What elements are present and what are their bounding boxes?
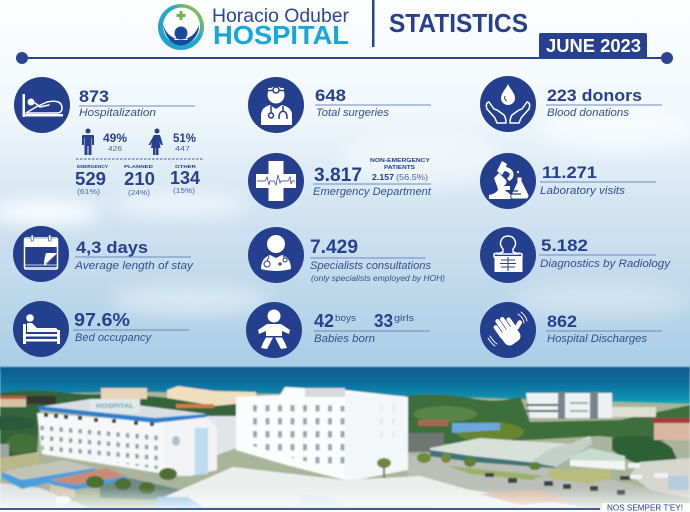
gender split (82, 128, 196, 155)
panel: babies born: boys (335, 313, 357, 323)
panel: babies born (246, 302, 430, 358)
value: 11.271 (542, 163, 597, 182)
non-emergency patients note: PATIENTS (384, 165, 415, 171)
panel: specialists consultations (248, 227, 445, 283)
panel: blood donations (480, 76, 662, 132)
icon: specialist (248, 227, 304, 283)
values: 42 (314, 311, 334, 331)
admission types (75, 164, 200, 197)
panel: radiology (480, 227, 672, 283)
icon: hospital bed (14, 77, 70, 133)
building between wings (207, 416, 236, 455)
title: STATISTICS (389, 8, 528, 38)
admission types: 134 (170, 168, 200, 188)
panel: bed occupancy (13, 301, 189, 357)
panel: average length of stay (13, 226, 195, 282)
tall white building (236, 387, 408, 480)
icon: microscope and flask (480, 153, 536, 209)
value: 223 donors (547, 86, 642, 105)
icon: baby (246, 302, 302, 358)
palms by tower (377, 453, 451, 479)
admission types: OTHER (175, 164, 197, 170)
value: 7.429 (310, 237, 358, 258)
icon: cross with heartbeat (248, 153, 304, 209)
label: Bed occupancy (75, 332, 153, 344)
value: 4,3 days (76, 238, 148, 257)
icon: patient in bed (13, 301, 69, 357)
gender split: 51% (173, 131, 196, 145)
panel: babies born: girls (394, 313, 415, 323)
icon: hands with blood drop (480, 76, 536, 132)
header divider (372, 0, 374, 47)
admission types: (15%) (173, 186, 196, 195)
label: Specialists consultations (310, 260, 432, 272)
trees right (405, 394, 690, 446)
left hospital building (39, 399, 207, 420)
logo wordmark: Horacio Oduber (212, 6, 350, 27)
non-emergency patients note: (56.5%) (396, 173, 428, 182)
value: 3.817 (314, 165, 362, 186)
logo: HOSPITAL (213, 20, 349, 50)
icon: doctor (248, 77, 304, 133)
low annexes left (2, 460, 95, 485)
label: Total surgeries (316, 107, 390, 119)
foreground white roof (157, 467, 585, 507)
non-emergency patients note: 2.157 (372, 173, 395, 182)
icon: man (82, 128, 94, 155)
icon: woman (148, 128, 163, 155)
panel: hospital discharges (480, 302, 662, 358)
label: Emergency Department (313, 186, 432, 198)
gender split: 49% (103, 131, 127, 145)
footnote: (only specialists employed by HOH) (311, 274, 445, 283)
value: 5.182 (541, 236, 588, 255)
date tab (539, 33, 647, 58)
date tab: JUNE 2023 (546, 36, 641, 56)
apartment block (526, 393, 612, 418)
panel: babies born: 33 (374, 311, 393, 331)
icon: calendar (13, 226, 69, 282)
label: Laboratory visits (540, 185, 626, 197)
palms left (86, 468, 177, 494)
trees behind left (0, 390, 240, 462)
hospital aerial photo: HOSPITAL (96, 403, 134, 410)
logo (158, 4, 350, 50)
value: 97.6% (74, 310, 130, 330)
hospital aerial photo (0, 367, 690, 512)
label: Blood donations (547, 107, 630, 119)
label: Diagnostics by Radiology (540, 258, 672, 270)
logo emblem (158, 4, 204, 50)
panel: emergency department (248, 153, 432, 209)
admission types: PLANNED (124, 164, 154, 170)
value: 862 (547, 312, 577, 331)
clouds (0, 108, 690, 318)
label: Hospital Discharges (547, 333, 648, 345)
background sky (0, 0, 690, 372)
admission types: (61%) (77, 187, 101, 196)
admission types: (24%) (128, 188, 151, 197)
bottom fade (0, 488, 690, 510)
admission types: EMERGENCY (77, 164, 109, 170)
panel: laboratory visits (480, 153, 656, 209)
label: Hospitalization (79, 107, 156, 119)
far left buildings (0, 397, 26, 407)
beach-side building and red house (612, 407, 656, 417)
value: 873 (79, 87, 109, 106)
non-emergency patients note (370, 158, 430, 182)
non-emergency patients note: NON-EMERGENCY (370, 158, 430, 164)
land base (0, 392, 690, 512)
footer rule and motto (0, 503, 690, 512)
label: Babies born (314, 333, 375, 345)
foreground ground left (0, 483, 90, 508)
label: Average length of stay (74, 260, 195, 272)
admission types: 529 (75, 169, 106, 189)
panel: hospitalization (14, 77, 203, 197)
icon: x-ray (480, 227, 536, 283)
value: 648 (315, 86, 346, 105)
gender split: 447 (175, 144, 190, 153)
timeline rule (16, 52, 673, 64)
icon: waving hand (480, 302, 536, 358)
gender split: 426 (108, 144, 122, 153)
sea (0, 367, 690, 409)
low clinic buildings (430, 436, 592, 466)
admission types: 210 (124, 169, 155, 189)
cars (485, 473, 632, 495)
panel: surgeries (248, 77, 431, 133)
road and parking ground (408, 455, 690, 512)
